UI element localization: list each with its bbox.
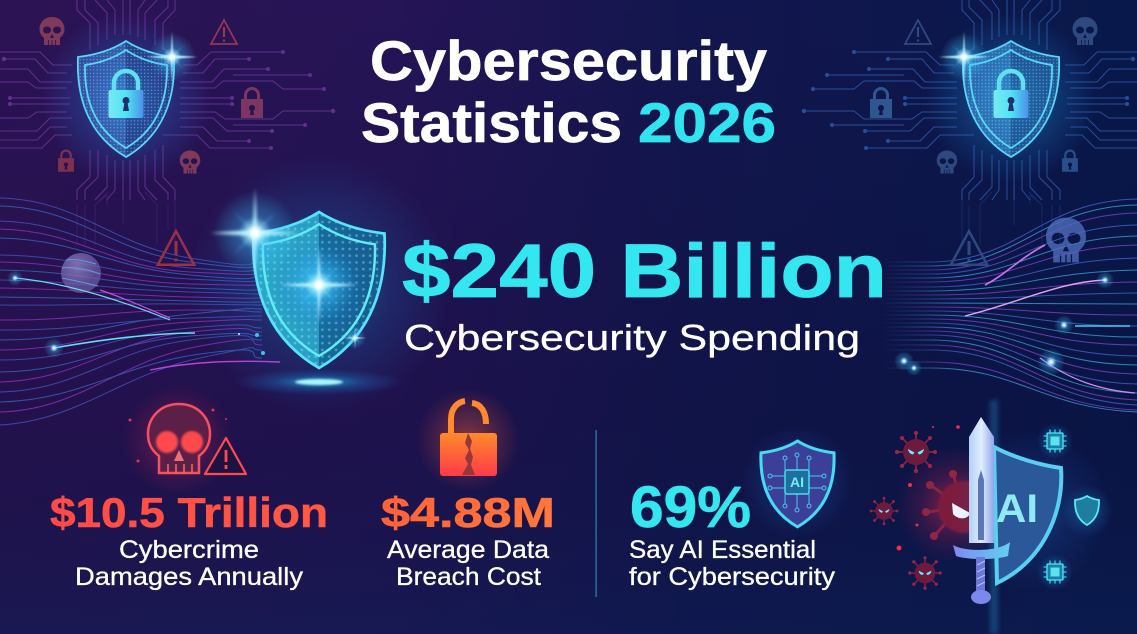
icon: broken orange padlock [416,388,520,492]
icon: faded skull small left [180,151,200,173]
value: 4.88M: $4.88M [381,489,555,536]
label: AI essential [629,536,836,591]
icon: faded warning top right [905,20,931,44]
value: 10.5 trillion: $10.5 Trillion [50,489,328,536]
icon: translucent sphere [61,253,101,293]
icon: chip bottom [1037,554,1073,590]
icon: faded lock small right [1062,149,1078,172]
title [361,29,776,154]
icon: faded lock left [241,87,263,118]
value: 69 percent: 69% [630,475,751,540]
light streaks left [7,270,280,370]
icon: faded skull top right [1072,17,1098,45]
label: cybercrime damages [75,536,304,591]
icon: warning triangle mid left [158,231,194,265]
main stat: value: $240 Billion [402,229,887,314]
icon: faded lock right [870,87,892,118]
icon: red sparks [896,425,960,550]
title: Cybersecurity [370,29,767,92]
icon: small viruses [870,431,942,590]
label: average data breach cost [387,536,549,591]
icon: top right shield with padlock [926,13,1096,183]
icon: AI circuit shield [741,426,853,538]
icon: faded lock small left [58,149,74,172]
label: AI essential: for Cybersecurity [629,563,836,591]
icon: large red virus [897,447,1013,563]
right circuit board pattern [802,0,1137,245]
icon: mini shield [1061,485,1113,537]
divider [596,430,597,597]
label: average data breach cost: Breach Cost [396,563,541,591]
icon: warning triangle mid right [951,231,987,265]
left circuit board pattern [0,0,335,245]
label: AI essential: Say AI Essential [629,536,816,564]
flow lines: left [0,198,262,425]
icon: top left shield with padlock [41,13,211,183]
icon: faded skull small right [937,151,957,173]
icon: AI circuit shield: AI [790,474,804,490]
light streaks right [894,245,1135,393]
icon: large AI shield: AI [996,487,1038,531]
icon: main glowing shield [189,155,449,415]
icon: sword [953,417,1010,604]
icon: neon red skull with warning [123,385,246,495]
main stat: label: Cybersecurity Spending [404,317,860,358]
label: average data breach cost: Average Data [387,536,549,564]
icon: faded skull top left [40,17,64,45]
title: Statistics [361,91,622,154]
glow column behind sword [990,400,998,634]
icon: large AI shield [950,430,1110,590]
icon: chip top [1037,423,1073,459]
title: 2026 [638,91,776,154]
icon: translucent skull right [1046,218,1086,262]
label: cybercrime damages: Damages Annually [75,563,304,591]
icon: faded warning top left [211,20,237,44]
flow lines: right [885,199,1137,412]
label: cybercrime damages: Cybercrime [119,536,259,564]
